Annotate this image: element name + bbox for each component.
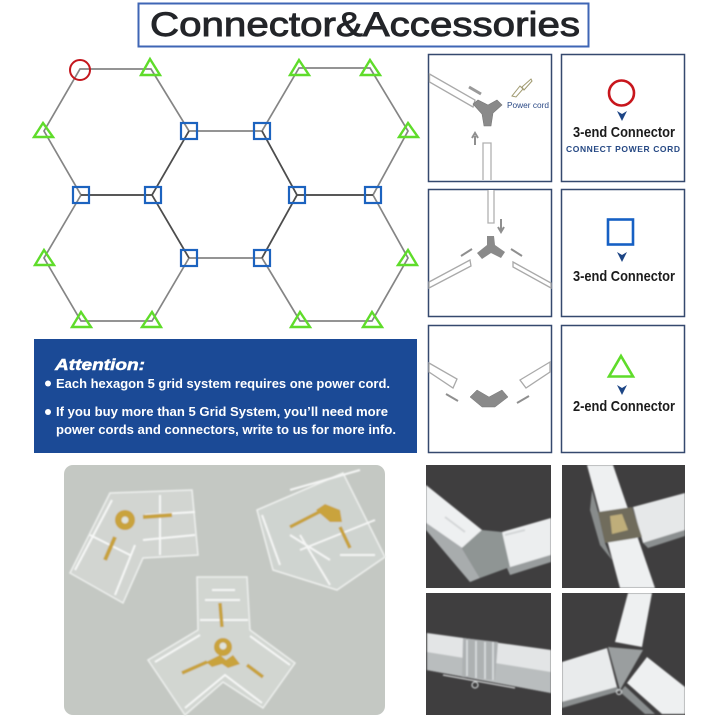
- arrows: [446, 394, 529, 403]
- icon: green triangle: [609, 356, 633, 376]
- arrow: [617, 385, 627, 395]
- connector: [470, 390, 508, 407]
- connector: top left: [70, 490, 198, 603]
- tube: [488, 190, 494, 223]
- connector: top right: [257, 470, 385, 590]
- title: Connector&Accessories: [150, 6, 580, 44]
- arrows: [469, 87, 481, 94]
- panel: circle legend: [562, 54, 684, 182]
- power cord label: Power cord: [507, 100, 549, 110]
- icon: blue square: [608, 220, 633, 244]
- bullet two: If you buy more than 5 Grid System, you’ll need more: [56, 404, 388, 419]
- markers: 3-end connector squares: [73, 123, 381, 266]
- arrow: [617, 252, 627, 262]
- tube: [430, 74, 475, 107]
- connector: bottom: [148, 577, 295, 715]
- tube: [483, 143, 491, 180]
- marker: power connector circle: [70, 60, 90, 80]
- label: 2-end Connector: [573, 398, 675, 415]
- photo: three-way joint: [562, 593, 685, 715]
- icon: power cord: [512, 79, 532, 97]
- sublabel: CONNECT POWER CORD: [566, 144, 680, 154]
- markers: 2-end connector triangles: [34, 59, 418, 327]
- panel: two-way assembly: [428, 326, 552, 452]
- photo: straight joint: [426, 593, 551, 715]
- bullet two: power cords and connectors, write to us for more info.: [56, 422, 396, 437]
- connector: [477, 236, 505, 259]
- photo: L joint: [426, 465, 551, 588]
- photo: cross joint: [562, 465, 685, 588]
- panel: three-way assembly: [428, 190, 552, 316]
- banner heading: Attention:: [54, 357, 145, 374]
- panel: triangle legend: [562, 326, 684, 452]
- hexagon lines: [44, 68, 408, 321]
- bullet two: [45, 404, 396, 437]
- tubes: [429, 362, 550, 388]
- bullet one: Each hexagon 5 grid system requires one power cord.: [56, 376, 390, 391]
- connector: [473, 100, 502, 126]
- icon: red circle: [609, 80, 634, 106]
- tubes: [429, 260, 551, 288]
- panel: power cord assembly: [428, 54, 552, 182]
- panel: square legend: [562, 190, 684, 316]
- attention banner: [34, 339, 417, 453]
- arrows: [461, 219, 522, 256]
- photo: transparent connectors: [64, 465, 385, 715]
- arrow: [617, 111, 627, 121]
- label: 3-end Connector: [573, 268, 675, 285]
- arrow: [472, 133, 478, 145]
- hexagon grid diagram: [34, 59, 418, 327]
- label: 3-end Connector: [573, 124, 675, 141]
